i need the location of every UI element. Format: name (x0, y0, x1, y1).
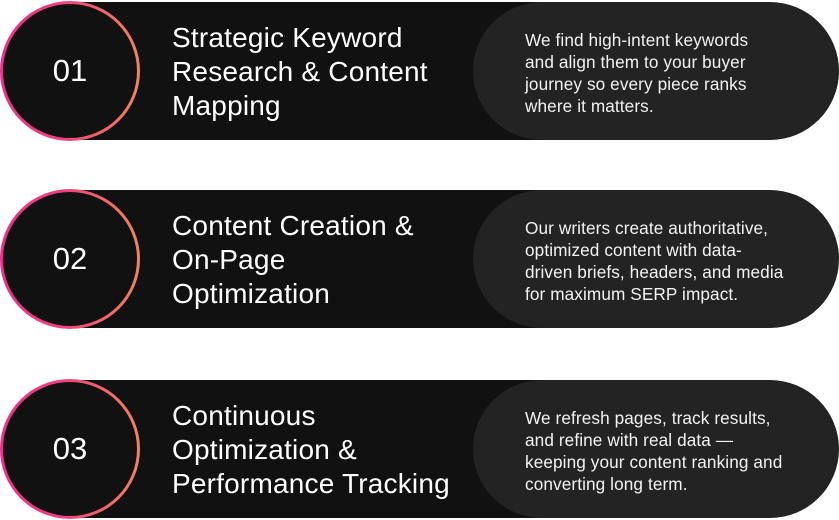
title 1: Mapping (172, 90, 281, 121)
description pill 2 (473, 190, 839, 328)
description pill 1 (473, 2, 839, 140)
circle 01: 01 (53, 53, 87, 88)
title 1: Strategic Keyword (172, 22, 403, 53)
title 3: Performance Tracking (172, 468, 450, 499)
title 2: On-Page (172, 244, 285, 275)
title 3: Optimization & (172, 434, 357, 465)
title 2 (172, 210, 414, 309)
description pill 1: and align them to your buyer (525, 52, 746, 72)
description pill 1: where it matters. (525, 96, 654, 116)
row 3 (0, 379, 839, 519)
circle 02 (0, 189, 140, 329)
circle 03 (0, 379, 140, 519)
title 1 (172, 22, 428, 121)
row 1 (0, 1, 839, 141)
title 1: Research & Content (172, 56, 428, 87)
description pill 2: for maximum SERP impact. (525, 284, 738, 304)
description pill 2: driven briefs, headers, and media (525, 262, 783, 282)
row 2 (0, 189, 839, 329)
description pill 1: We find high-intent keywords (525, 30, 748, 50)
description pill 3 (473, 380, 839, 518)
description pill 2: optimized content with data- (525, 240, 742, 260)
circle 01 (0, 1, 140, 141)
description pill 3: and refine with real data — (525, 430, 733, 450)
circle 03: 03 (53, 431, 87, 466)
description pill 3: converting long term. (525, 474, 688, 494)
description pill 3: We refresh pages, track results, (525, 408, 771, 428)
circle 02: 02 (53, 241, 87, 276)
description pill 3: keeping your content ranking and (525, 452, 782, 472)
title 3: Continuous (172, 400, 316, 431)
title 2: Optimization (172, 278, 330, 309)
description pill 1: journey so every piece ranks (525, 74, 747, 94)
description pill 2: Our writers create authoritative, (525, 218, 768, 238)
title 3 (172, 400, 450, 499)
title 2: Content Creation & (172, 210, 414, 241)
